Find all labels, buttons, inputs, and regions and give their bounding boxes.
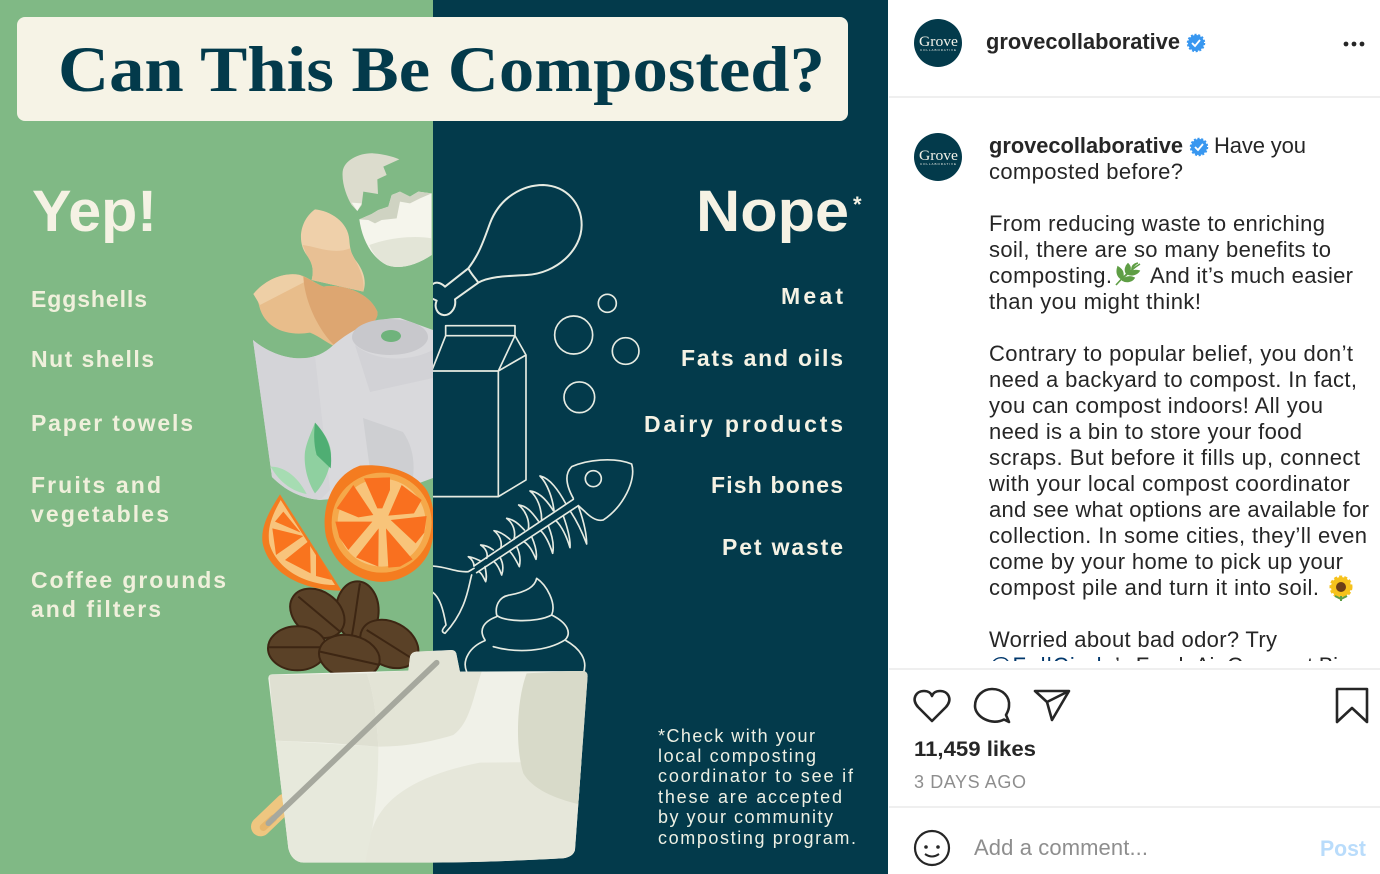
footnote: coordinator to see if (658, 766, 854, 786)
list: compostable items: Eggshells (31, 286, 147, 312)
caption text: grovecollaborative (989, 133, 1183, 158)
caption text: Have you (1214, 133, 1306, 158)
caption text: composting. (989, 263, 1112, 288)
comment bar (915, 831, 1367, 865)
footnote: *Check with your (658, 726, 815, 746)
avatar: caption logo: COLLABORATIVE (920, 162, 956, 166)
list: compostable items: and filters (31, 596, 161, 622)
caption text: and see what options are available for (989, 497, 1369, 522)
username: header: grovecollaborative (986, 29, 1180, 54)
avatar: caption logo: Grove (919, 148, 958, 164)
icon: meat drumstick outline (432, 185, 582, 315)
footnote (658, 726, 856, 848)
icon: fish bones outline (432, 460, 633, 633)
caption text: need is a bin to store your food (989, 419, 1302, 444)
panel: no side background (433, 0, 888, 874)
icon: verified badge (1188, 35, 1204, 51)
comment placeholder: Add a comment... (974, 835, 1148, 860)
icon: oil bubbles outline (555, 294, 639, 413)
title: Can This Be Composted? (58, 34, 825, 106)
footnote: composting program. (658, 828, 856, 848)
caption text: scraps. But before it fills up, connect (989, 445, 1360, 470)
list: compostable items (31, 286, 226, 622)
icon: heart (915, 691, 949, 721)
list: non-compostable items: Dairy products (644, 411, 843, 437)
footnote: by your community (658, 807, 833, 827)
icon: bookmark (1337, 689, 1367, 722)
caption text: From reducing waste to enriching (989, 211, 1325, 236)
icon: milk carton outline (432, 326, 526, 497)
caption text: composted before? (989, 159, 1183, 184)
caption text: Contrary to popular belief, you don’t (989, 341, 1353, 366)
avatar: header logo (914, 19, 962, 67)
list: compostable items: Paper towels (31, 410, 193, 436)
icon: share (1035, 691, 1069, 720)
caption text: collection. In some cities, they’ll even (989, 523, 1367, 548)
list: non-compostable items: Meat (781, 283, 843, 309)
caption text: come by your home to pick up your (989, 549, 1343, 574)
title banner (17, 17, 848, 121)
icon: more menu (1344, 42, 1364, 46)
avatar: caption logo (914, 133, 962, 181)
icon: smiley (915, 831, 949, 865)
caption text: soil, there are so many benefits to (989, 237, 1331, 262)
list: non-compostable items: Pet waste (722, 534, 843, 560)
caption text: with your local compost coordinator (988, 471, 1350, 496)
icon: orange slices (262, 465, 434, 591)
panel: post sidebar (888, 0, 1380, 874)
icon: green leaves (271, 423, 331, 494)
divider top (889, 96, 1380, 98)
avatar: header logo: COLLABORATIVE (920, 48, 956, 52)
list: compostable items: Coffee grounds (31, 567, 226, 593)
footnote: local composting (658, 746, 816, 766)
caption text: ’s Fresh Air Compost Bin (1115, 653, 1350, 678)
list: compostable items: vegetables (31, 501, 169, 527)
caption text: compost pile and turn it into soil. (989, 575, 1319, 600)
icon: pet waste outline (465, 578, 585, 673)
divider middle (889, 668, 1380, 670)
heading: Nope: Nope (696, 179, 849, 244)
action icons (915, 689, 1367, 722)
list: non-compostable items: Fish bones (711, 472, 843, 498)
post button: Post (1320, 836, 1367, 861)
caption text: @FullCircle (989, 653, 1115, 678)
icon: comment (975, 689, 1009, 722)
panel: compost infographic (0, 0, 888, 874)
list: compostable items: Nut shells (31, 346, 154, 372)
icon: eggshells (343, 153, 432, 267)
caption text: And it’s much easier (1150, 263, 1353, 288)
list: non-compostable items: Fats and oils (681, 345, 843, 371)
icon: nut shells (253, 209, 378, 347)
list: compostable items: Fruits and (31, 472, 161, 498)
panel: yes side background (0, 0, 433, 874)
icon: paper towels (253, 318, 433, 500)
icon: compost bag (261, 650, 590, 863)
caption text: you can compost indoors! All you (989, 393, 1323, 418)
footnote: these are accepted (658, 787, 842, 807)
caption text: need a backyard to compost. In fact, (989, 367, 1357, 392)
heading: Nope: * (853, 192, 862, 217)
divider bottom (889, 806, 1380, 808)
heading: Yep!: Yep! (32, 179, 157, 244)
caption text: Worried about bad odor? Try (989, 627, 1277, 652)
likes count: 11,459 likes (914, 738, 1036, 761)
caption text (988, 133, 1369, 678)
timestamp: 3 DAYS AGO (914, 772, 1026, 792)
caption text: than you might think! (989, 289, 1201, 314)
icon: coffee beans (268, 578, 427, 684)
avatar: header logo: Grove (919, 34, 958, 50)
list: non-compostable items (644, 283, 843, 560)
